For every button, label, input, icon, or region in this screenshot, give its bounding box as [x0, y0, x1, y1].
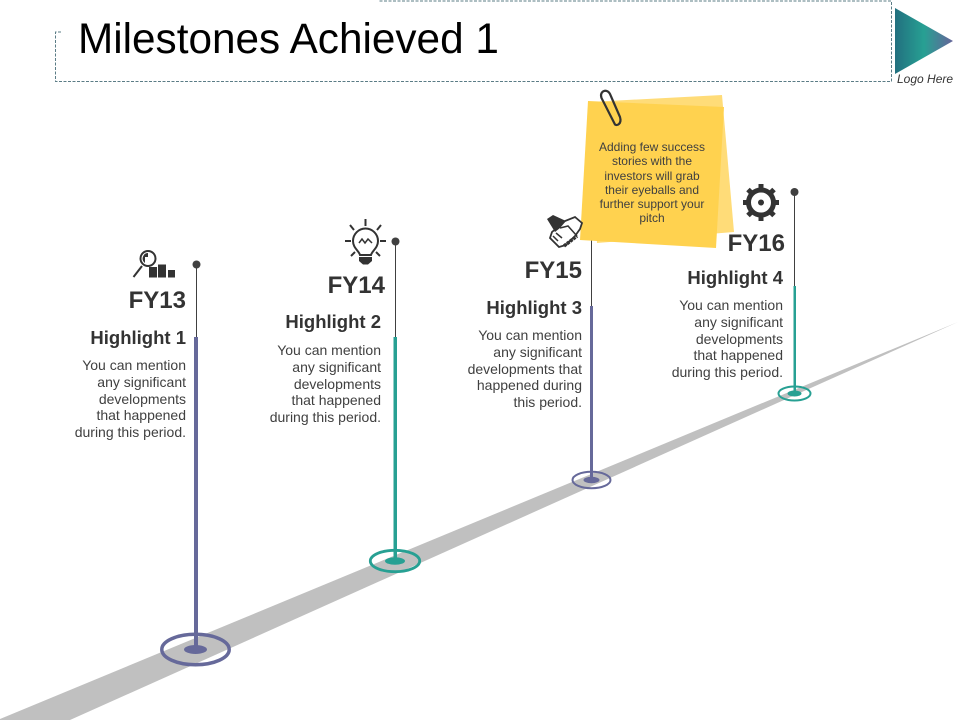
text block FY14: Highlight 2	[285, 311, 381, 332]
text block FY14: during this period.	[270, 409, 381, 425]
text block FY16: any significant	[694, 314, 783, 330]
marker FY13	[162, 260, 229, 665]
text block FY14: developments	[294, 376, 381, 392]
road	[0, 322, 958, 720]
logo triangle	[895, 8, 953, 74]
sticky note text: investors will grab	[604, 169, 700, 183]
text block FY16: that happened	[693, 347, 783, 363]
sticky note text: further support your	[600, 197, 704, 211]
title frame	[56, 1, 892, 82]
text block FY14: You can mention	[277, 342, 381, 358]
text block FY13: developments	[99, 391, 186, 407]
text block FY15: FY15	[525, 257, 582, 284]
text block FY13: any significant	[97, 374, 186, 390]
text block FY15: developments that	[468, 361, 582, 377]
marker FY16	[778, 188, 810, 400]
icon: handshake	[547, 215, 582, 247]
sticky note text: their eyeballs and	[605, 183, 699, 197]
text block FY15: Highlight 3	[486, 297, 582, 318]
text block FY13: during this period.	[75, 424, 186, 440]
icon: gear	[743, 184, 779, 221]
text block FY15: any significant	[493, 344, 582, 360]
sticky note	[580, 91, 734, 248]
icon: light bulb	[345, 219, 386, 264]
text block FY13: You can mention	[82, 357, 186, 373]
text block FY13: FY13	[129, 287, 186, 314]
text block FY16: developments	[696, 331, 783, 347]
text block FY16: Highlight 4	[687, 267, 783, 288]
text block FY13	[75, 287, 186, 440]
sticky note text	[599, 140, 705, 225]
marker FY14	[370, 238, 420, 572]
text block FY15: this period.	[514, 394, 582, 410]
text block FY15: happened during	[477, 377, 582, 393]
sticky note text: Adding few success	[599, 140, 705, 154]
text block FY16: during this period.	[672, 364, 783, 380]
icon: paperclip	[601, 91, 620, 125]
text block FY14: any significant	[292, 359, 381, 375]
text block FY13: that happened	[96, 407, 186, 423]
text block FY16: FY16	[728, 230, 785, 257]
text block FY16	[672, 230, 785, 380]
marker FY15	[572, 240, 610, 488]
sticky note text: pitch	[639, 211, 665, 225]
text block FY16: You can mention	[679, 297, 783, 313]
icon: magnifier and bars	[134, 251, 175, 278]
text block FY15: You can mention	[478, 327, 582, 343]
sticky note text: stories with the	[612, 154, 692, 168]
text block FY14: FY14	[328, 272, 385, 299]
logo caption: Logo Here	[897, 72, 953, 86]
text block FY15	[468, 257, 582, 410]
text block FY14	[270, 272, 385, 425]
text block FY14: that happened	[291, 392, 381, 408]
title: Milestones Achieved 1	[78, 15, 499, 62]
text block FY13: Highlight 1	[90, 327, 186, 348]
